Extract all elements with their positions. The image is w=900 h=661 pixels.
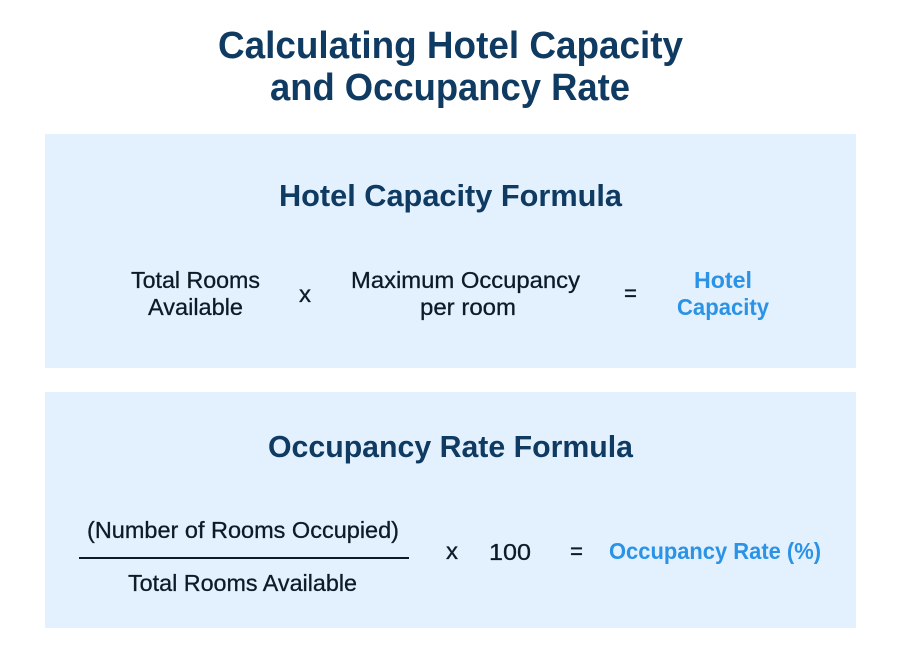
title	[218, 25, 683, 109]
text: maximum occupancy per room: per room	[420, 294, 516, 320]
heading: occupancy rate formula: Occupancy Rate Formula	[268, 429, 634, 464]
operator: equals: =	[570, 538, 583, 564]
title: Calculating Hotel Capacity	[218, 25, 683, 67]
panel: hotel capacity formula	[45, 134, 856, 368]
heading: hotel capacity formula: Hotel Capacity Formula	[279, 178, 623, 213]
operator: multiply: x	[446, 538, 458, 564]
fraction: Total Rooms Available	[128, 570, 357, 596]
text: total rooms available	[131, 267, 260, 320]
result: occupancy rate: Occupancy Rate (%)	[609, 538, 821, 564]
title: and Occupancy Rate	[270, 67, 630, 109]
result: hotel capacity	[677, 267, 769, 320]
fraction: (Number of Rooms Occupied)	[87, 517, 399, 543]
number: 100: 100	[489, 539, 531, 565]
text: total rooms available: Available	[148, 294, 243, 320]
panel: occupancy rate formula	[45, 392, 856, 628]
result: hotel capacity: Hotel	[694, 267, 752, 293]
text: total rooms available: Total Rooms	[131, 267, 260, 293]
operator: equals: =	[624, 280, 637, 306]
result: hotel capacity: Capacity	[677, 294, 769, 320]
operator: multiply: x	[299, 281, 311, 307]
fraction	[79, 517, 409, 596]
text: maximum occupancy per room: Maximum Occupancy	[351, 267, 580, 293]
text: maximum occupancy per room	[351, 267, 580, 320]
